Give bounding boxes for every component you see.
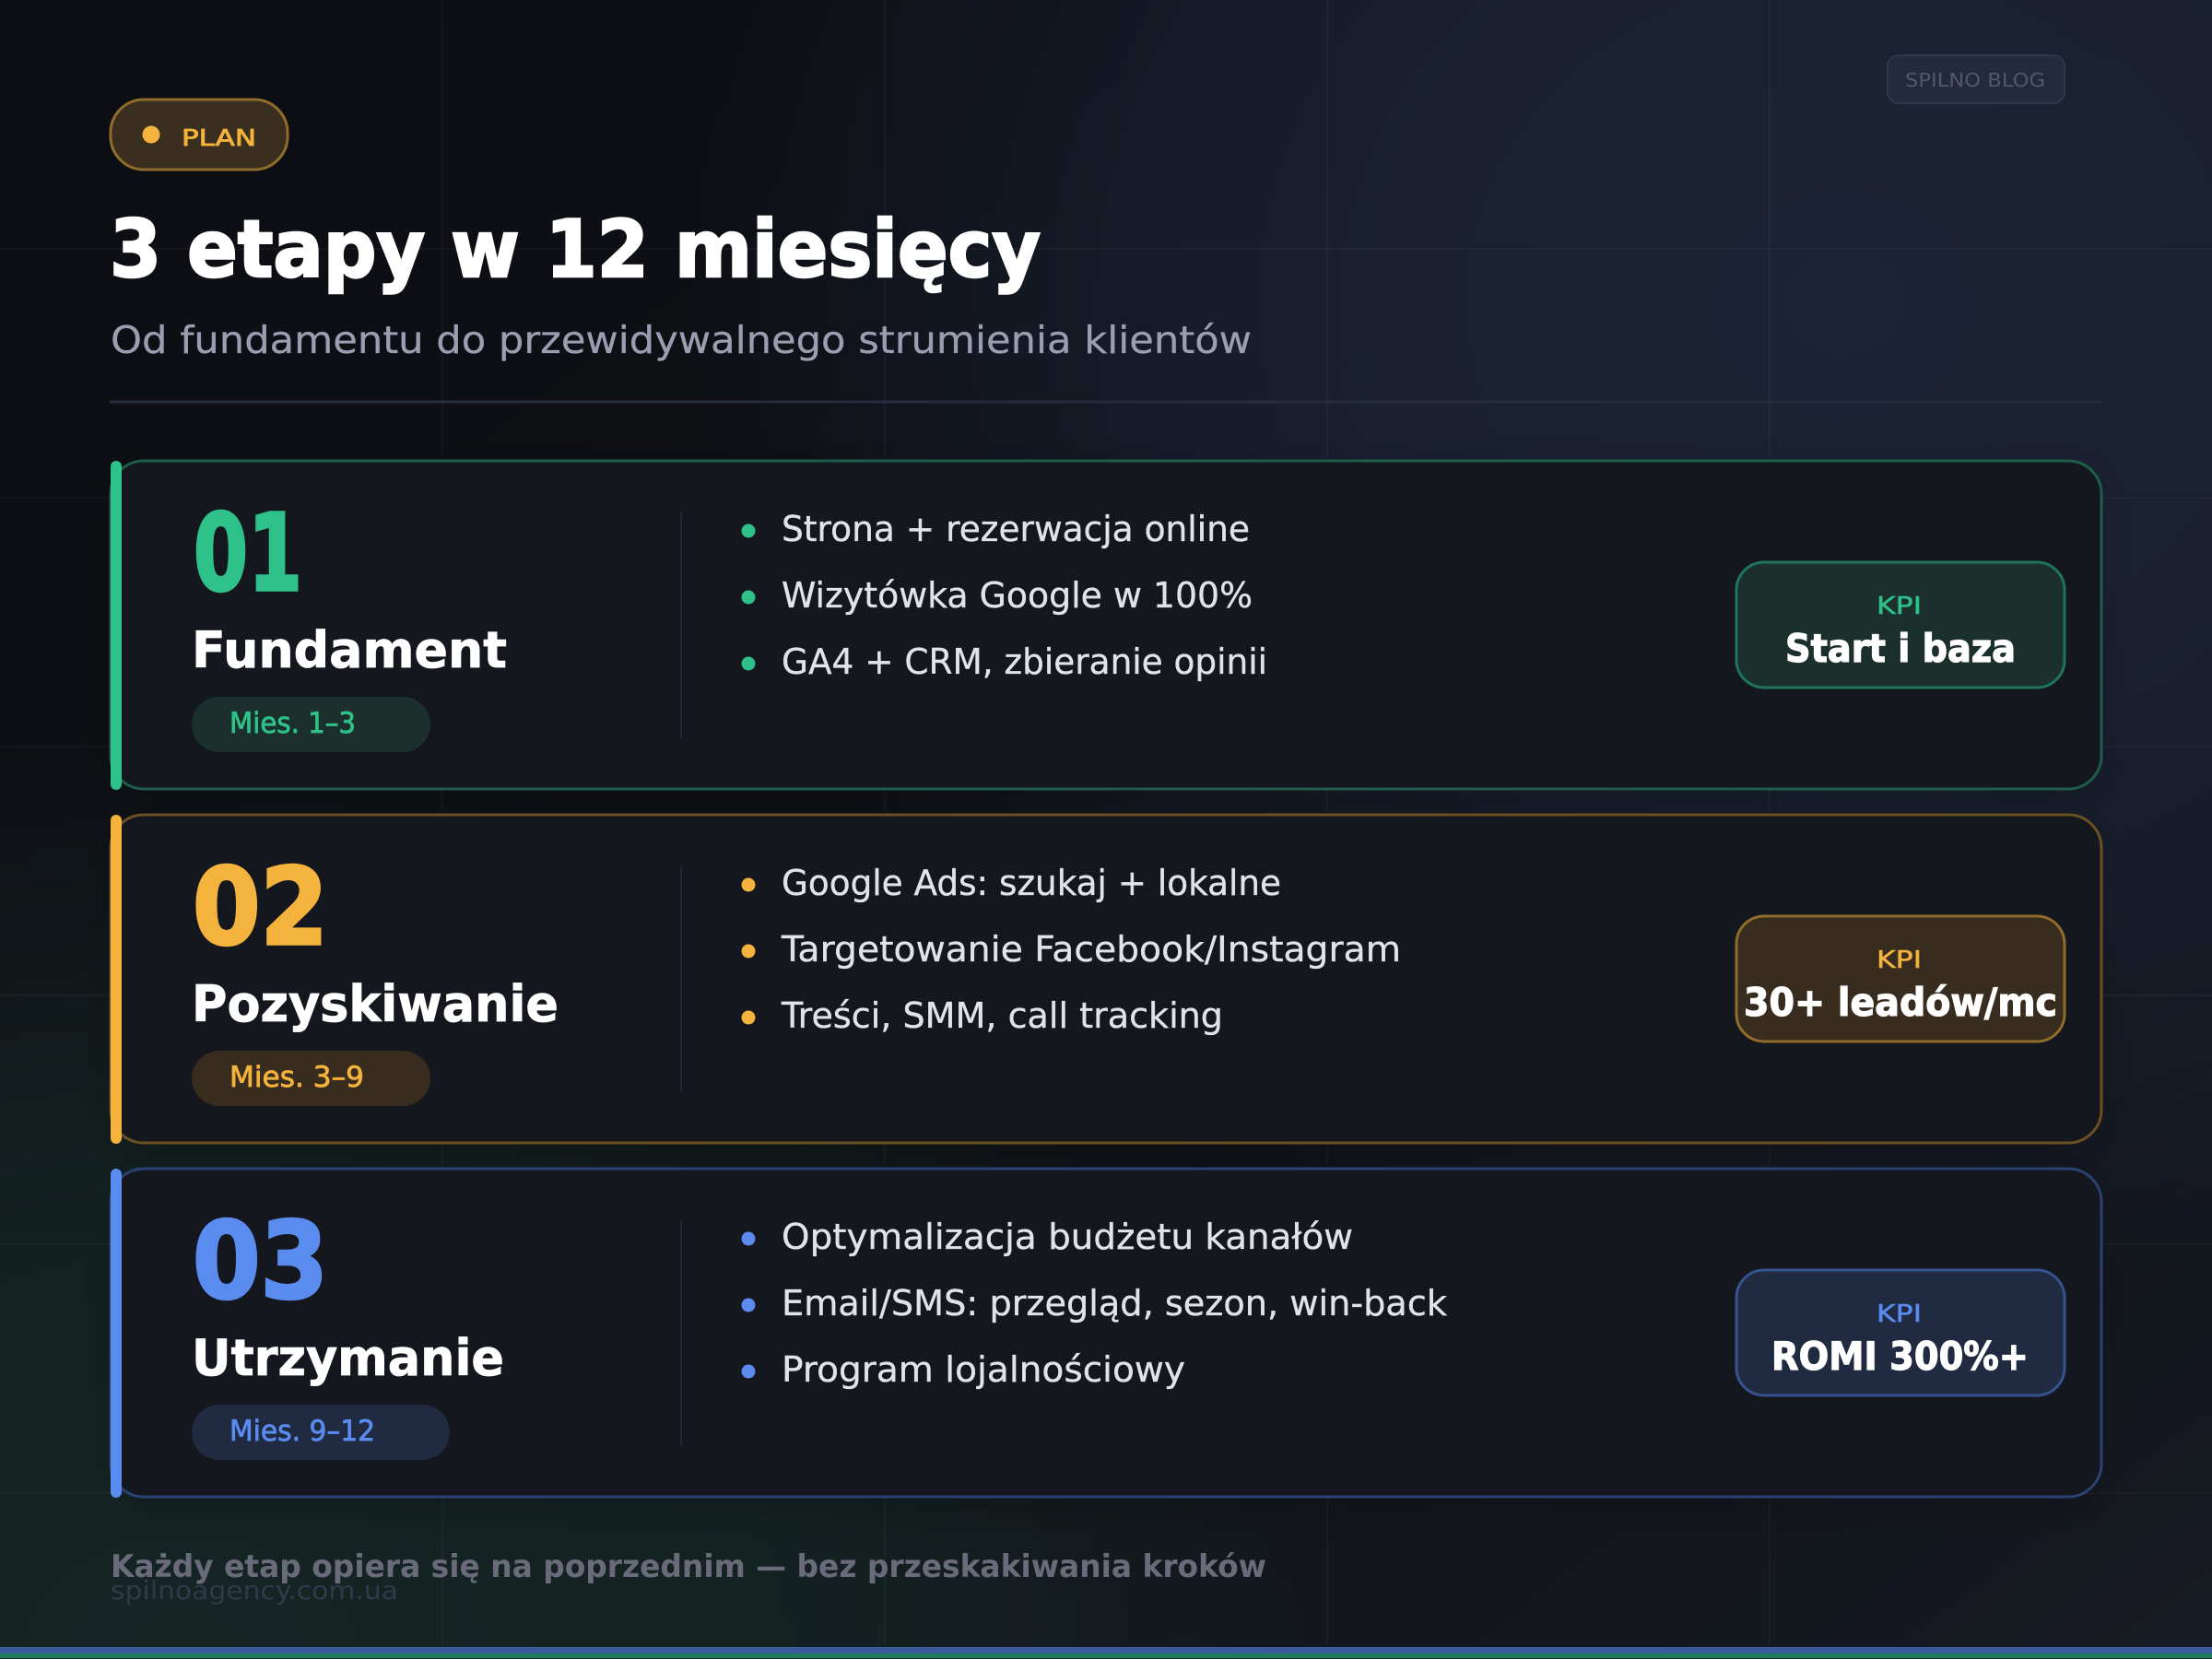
number: 02: [193, 846, 328, 970]
accent bar: [111, 461, 122, 790]
bullet list: Targetowanie Facebook/Instagram: [781, 929, 1401, 970]
KPI box: [1736, 916, 2065, 1041]
period pill: Mies. 1–3: [229, 707, 356, 740]
bullet list: Treści, SMM, call tracking: [781, 995, 1223, 1036]
period pill: [192, 1051, 430, 1106]
footer note: Każdy etap opiera się na poprzednim — bez przeskakiwania kroków: [111, 1548, 1266, 1585]
panel: etap 03 Utrzymanie: [111, 1169, 2101, 1498]
KPI box: KPI: [1877, 593, 1922, 620]
stage name: Fundament: [192, 621, 507, 679]
KPI box: KPI: [1877, 947, 1922, 974]
bullet list: Google Ads: szukaj + lokalne: [782, 863, 1281, 903]
number: 01: [194, 492, 302, 616]
bullet list: [741, 863, 1401, 1036]
title: 3 etapy w 12 miesięcy: [110, 204, 1041, 296]
tag: PLAN: PLAN: [182, 124, 256, 151]
KPI box: KPI: [1877, 1300, 1922, 1328]
panel: etap 01 Fundament: [111, 461, 2101, 790]
badge: SPILNO BLOG: SPILNO BLOG: [1905, 69, 2045, 91]
KPI box: 30+ leadów/mc: [1744, 980, 2057, 1025]
badge: SPILNO BLOG: [1888, 55, 2065, 103]
bullet list: Optymalizacja budżetu kanałów: [782, 1217, 1353, 1257]
KPI box: [1736, 562, 2065, 688]
bottom stripe: [0, 1647, 2212, 1659]
stage name: Pozyskiwanie: [192, 975, 559, 1033]
bullet list: Strona + rezerwacja online: [782, 509, 1250, 549]
bullet list: Wizytówka Google w 100%: [782, 575, 1253, 616]
period pill: Mies. 9–12: [229, 1415, 375, 1448]
bullet list: [741, 509, 1267, 682]
bullet list: Program lojalnościowy: [782, 1349, 1185, 1390]
period pill: [192, 697, 430, 752]
KPI box: Start i baza: [1785, 626, 2016, 671]
panel: etap 02 Pozyskiwanie: [111, 815, 2101, 1144]
period pill: [192, 1405, 450, 1460]
bullet list: [741, 1217, 1447, 1390]
bullet list: Email/SMS: przegląd, sezon, win-back: [782, 1283, 1447, 1324]
KPI box: [1736, 1270, 2065, 1395]
tag: PLAN: [111, 100, 288, 170]
bullet list: GA4 + CRM, zbieranie opinii: [782, 641, 1267, 682]
footer url: spilnoagency.com.ua: [111, 1575, 398, 1606]
stage name: Utrzymanie: [192, 1329, 504, 1387]
number: 03: [193, 1200, 328, 1324]
accent bar: [111, 815, 122, 1144]
period pill: Mies. 3–9: [229, 1061, 364, 1094]
KPI box: ROMI 300%+: [1771, 1334, 2029, 1379]
subtitle: Od fundamentu do przewidywalnego strumienia klientów: [111, 318, 1252, 362]
accent bar: [111, 1169, 122, 1498]
